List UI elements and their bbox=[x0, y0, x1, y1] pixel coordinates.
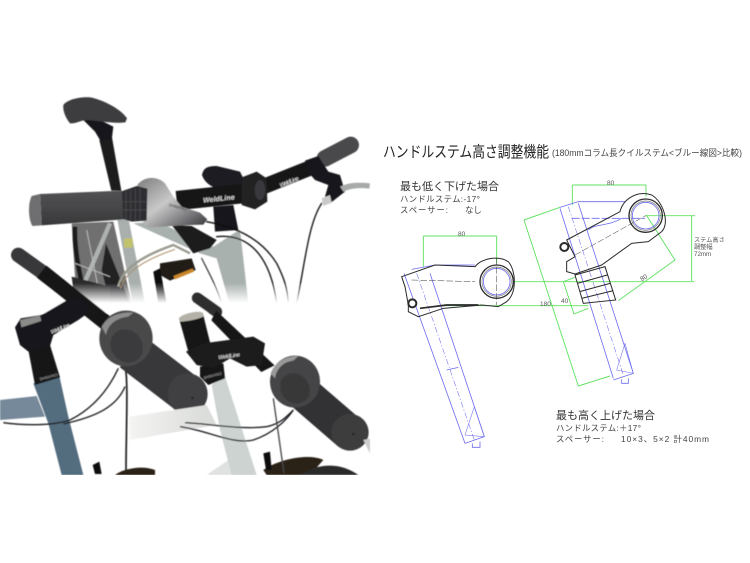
high stem: blue quill column bbox=[560, 202, 659, 383]
caption: lowest position: なし bbox=[465, 205, 482, 215]
right bike: SHIMANO bbox=[203, 371, 222, 380]
dimension label: stem height adjustment: 調整幅 bbox=[694, 243, 713, 251]
dimension label: 180: 180 bbox=[540, 301, 551, 308]
dimension label: 80 high: 80 bbox=[607, 180, 615, 187]
caption: highest position bbox=[556, 408, 709, 444]
big grip body bbox=[132, 352, 188, 395]
right clamp and lever bbox=[305, 156, 345, 203]
light top tube bbox=[129, 405, 217, 440]
stem cap bbox=[20, 316, 41, 327]
low stem: black outline bbox=[402, 258, 514, 317]
shifter cables bbox=[202, 203, 322, 303]
steerer column bbox=[179, 313, 211, 352]
pedal bbox=[153, 258, 196, 303]
bar logo 2: WeldLine bbox=[279, 176, 301, 189]
dimension label: 40: 40 bbox=[561, 298, 569, 305]
lever tip bbox=[363, 438, 370, 453]
left grip bbox=[40, 191, 123, 225]
stem logo: WeldLine bbox=[50, 323, 71, 336]
big grip end cap bbox=[168, 373, 208, 415]
left bike: SHIMANO bbox=[39, 372, 58, 382]
head stack bbox=[28, 345, 60, 385]
frame sticker bbox=[124, 238, 133, 248]
brake lever bbox=[172, 225, 217, 253]
caption: lowest position bbox=[400, 180, 499, 215]
big grip end cap bbox=[331, 414, 369, 451]
subtitle: (180mmコラム長クイルステム<ブルー線図>比較) bbox=[552, 147, 742, 158]
caption: lowest position: 最も低く下げた場合 bbox=[400, 180, 499, 193]
caption: highest position: スペーサー: bbox=[556, 434, 604, 444]
blue top tube bbox=[0, 396, 45, 420]
technical drawing bbox=[402, 185, 695, 447]
saddle bbox=[63, 97, 127, 140]
top tube bbox=[133, 222, 248, 303]
high stem: black outline bbox=[560, 194, 665, 303]
caption: highest position: ハンドルステム:＋17° bbox=[556, 423, 641, 433]
big grip collar bbox=[270, 356, 320, 408]
stem bbox=[186, 337, 265, 368]
saddle shapes bottom bbox=[115, 468, 155, 475]
photo: front bikes bbox=[0, 255, 370, 475]
cables bbox=[180, 398, 293, 473]
caption: lowest position: スペーサー: bbox=[400, 205, 448, 215]
left bike bbox=[0, 255, 208, 475]
head stem bbox=[213, 205, 238, 232]
big grip twist collar bbox=[99, 310, 153, 366]
photo: rear bike with stem lowered bbox=[29, 97, 370, 303]
right grip bbox=[325, 145, 351, 158]
twist shift ring bbox=[121, 186, 147, 222]
big grip body bbox=[302, 392, 350, 433]
seat tube bbox=[117, 219, 145, 303]
light head tube bbox=[212, 373, 257, 475]
dimension label: stem height adjustment: ステム高さ bbox=[694, 236, 725, 244]
blue head and down tube bbox=[33, 376, 83, 475]
colored brake cables bbox=[118, 245, 190, 287]
stem clamp bbox=[242, 172, 267, 209]
head stack bbox=[200, 363, 225, 385]
left grip end cap bbox=[29, 194, 42, 226]
dimension label: stem height adjustment bbox=[694, 236, 725, 258]
stem body bbox=[202, 166, 247, 190]
far bar and grip bbox=[197, 298, 217, 312]
white fade under rear bike bbox=[42, 282, 302, 304]
low stem: blue quill column bbox=[404, 265, 510, 447]
bar logo: WeldLine bbox=[203, 194, 235, 205]
seat post bbox=[99, 137, 121, 191]
left shifter body bbox=[137, 178, 207, 227]
caption: highest position: 最も高く上げた場合 bbox=[556, 408, 655, 422]
handlebar right section bbox=[263, 164, 320, 187]
right bike bbox=[93, 298, 370, 475]
caption: lowest position: ハンドルステム:-17° bbox=[400, 194, 480, 204]
dimension label: 80 slanted: 80 bbox=[639, 273, 649, 283]
right brake lever blade bbox=[340, 183, 370, 192]
green dimension lines bbox=[423, 185, 695, 386]
title: ハンドルステム高さ調整機能 bbox=[383, 143, 549, 161]
stem bbox=[15, 298, 90, 352]
infographic canvas bbox=[0, 96, 742, 475]
handlebar left section bbox=[177, 193, 245, 201]
photo: rear bike with stem lowered: SHIMANO bbox=[168, 202, 187, 212]
stem logo: WeldLine bbox=[218, 352, 240, 361]
far bar bbox=[42, 272, 107, 323]
brake clip bbox=[93, 452, 272, 474]
dimension label: 80 low: 80 bbox=[458, 231, 466, 238]
title bbox=[383, 143, 742, 161]
photo: bicycles with handlebar at low and high positions bbox=[0, 97, 375, 475]
wheel and spokes bbox=[72, 222, 132, 303]
caption: highest position: 10×3、5×2 計40mm bbox=[621, 434, 709, 444]
dimension label: stem height adjustment: 72mm bbox=[694, 251, 711, 258]
cables bbox=[3, 368, 127, 470]
far grip bbox=[18, 255, 42, 272]
